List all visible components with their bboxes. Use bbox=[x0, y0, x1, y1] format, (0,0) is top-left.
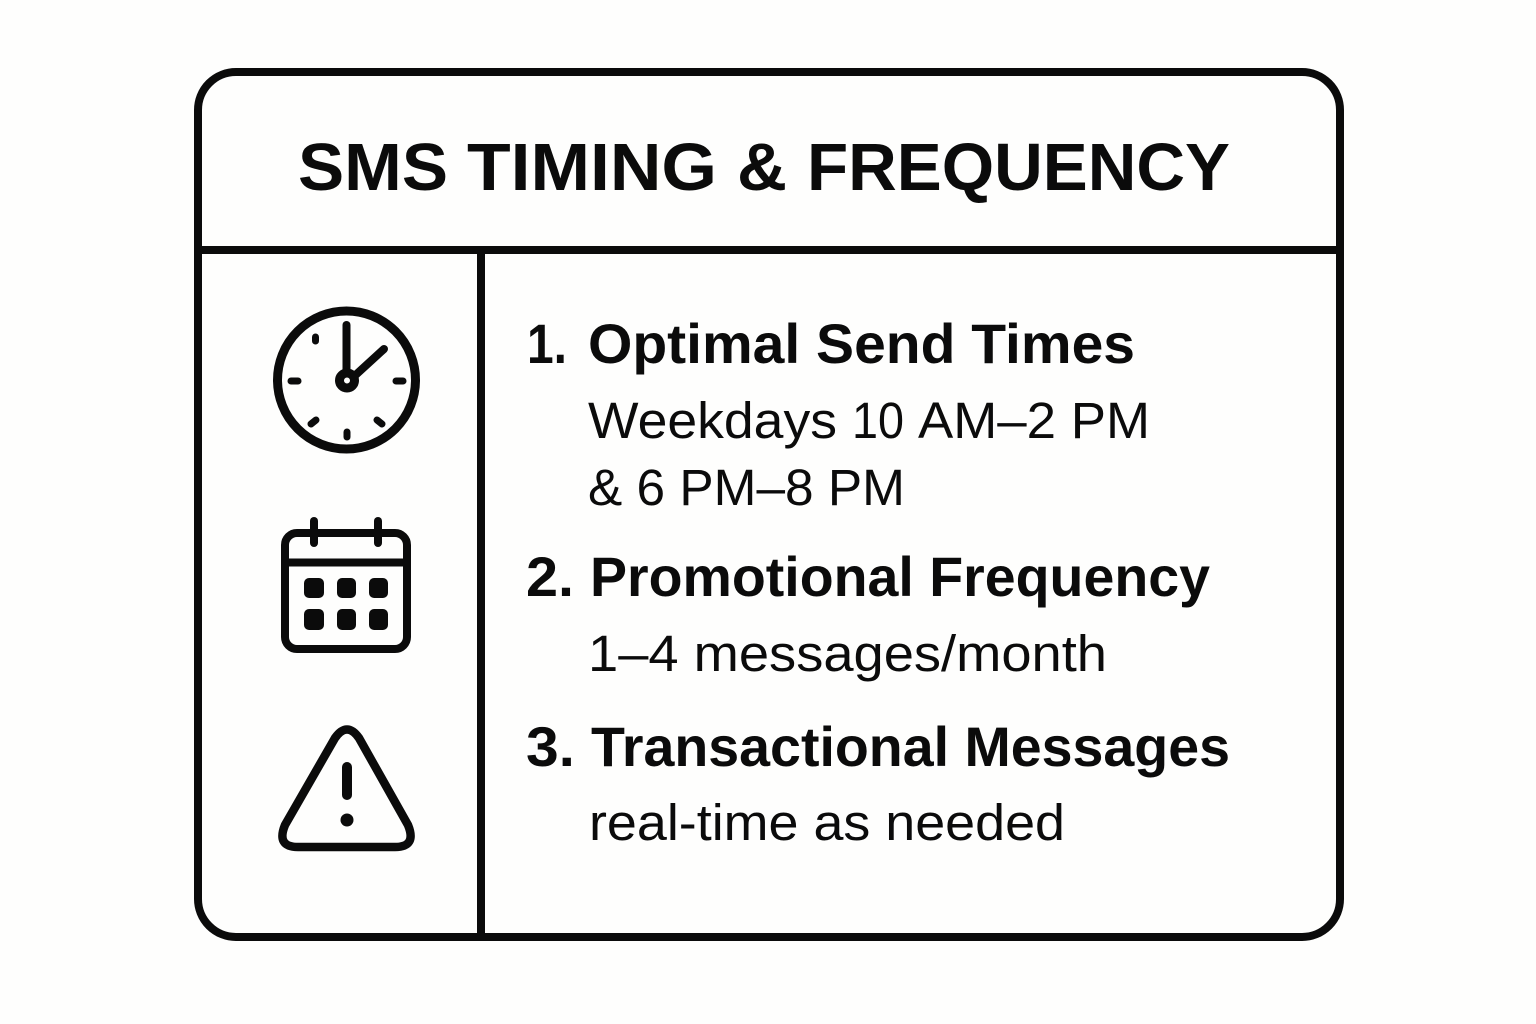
icon: clock bbox=[278, 311, 416, 449]
text block: optimal send times: AM–2 PM bbox=[918, 392, 1150, 449]
text block: promotional frequency: 1–4 messages/month bbox=[588, 625, 1107, 682]
text block: transactional messages bbox=[526, 715, 1230, 851]
text block: promotional frequency: 2. bbox=[526, 545, 574, 608]
icon: warning triangle bbox=[282, 730, 411, 847]
title: TIMING bbox=[467, 130, 717, 205]
panel: main card frame bbox=[198, 72, 1340, 937]
text block: optimal send times: & 6 PM–8 PM bbox=[588, 459, 905, 516]
text block: optimal send times bbox=[527, 312, 1150, 516]
title: & bbox=[737, 130, 787, 205]
icon: calendar bbox=[285, 521, 407, 649]
text block: promotional frequency: Promotional Frequency bbox=[590, 545, 1210, 608]
text block: optimal send times: 10 bbox=[852, 392, 904, 449]
text block: optimal send times: Optimal Send Times bbox=[588, 312, 1135, 375]
title: SMS bbox=[298, 130, 448, 205]
text block: transactional messages: Transactional Messages bbox=[591, 715, 1230, 778]
text block: promotional frequency bbox=[526, 545, 1210, 682]
title bbox=[298, 130, 1230, 205]
text block: transactional messages: real-time as needed bbox=[589, 794, 1065, 851]
title: FREQUENCY bbox=[807, 130, 1230, 205]
text block: optimal send times: Weekdays bbox=[588, 392, 837, 449]
text block: transactional messages: 3. bbox=[526, 715, 575, 778]
text block: optimal send times: 1. bbox=[527, 312, 567, 375]
